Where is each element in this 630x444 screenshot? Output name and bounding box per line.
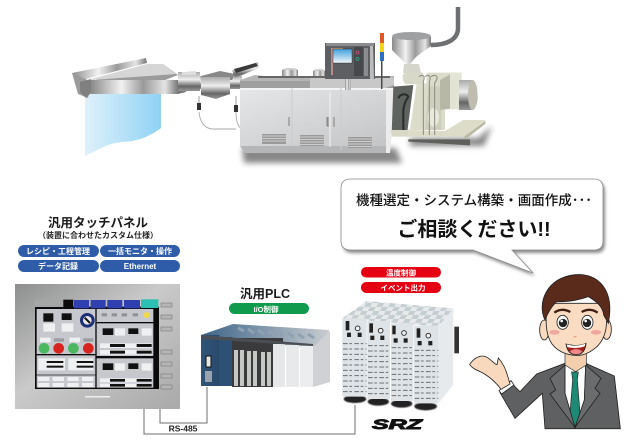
- tie: [570, 372, 580, 428]
- pill: recipe: レシピ・工程管理: [26, 246, 90, 256]
- PLC heading: 汎用PLC: [240, 286, 290, 301]
- extrusion machine illustration: [72, 7, 492, 163]
- pill: data logging: [18, 260, 99, 272]
- RS-485 wiring: [144, 387, 355, 434]
- SRZ logo: SRZ: [372, 416, 423, 432]
- film sheet: [85, 93, 161, 156]
- side keys: [161, 303, 172, 389]
- cabinet: [240, 88, 396, 153]
- pill: data logging: データ記録: [38, 261, 78, 271]
- SRZ controller modules: [342, 301, 459, 410]
- bubble shadow: [343, 182, 605, 276]
- barrel heaters: [240, 68, 394, 88]
- neck: [565, 350, 586, 372]
- material feed tube: [431, 7, 458, 45]
- eyes: [557, 315, 568, 329]
- SRZ terminal rows: [343, 344, 438, 398]
- PLC IO slots: [234, 350, 271, 386]
- connecting pipe and die: [178, 62, 259, 99]
- control box with screen: [325, 43, 375, 90]
- SRZ fronts: [342, 318, 438, 403]
- screen value bars: [47, 344, 152, 387]
- bezel: [15, 284, 180, 409]
- screen dial and buttons: [39, 312, 150, 354]
- RS-485 label: RS-485: [169, 424, 198, 434]
- PLC top: [201, 324, 329, 348]
- hand: [470, 356, 510, 389]
- mouth: [566, 343, 586, 355]
- face: [546, 303, 607, 356]
- screen gauges: [38, 323, 152, 387]
- lapels: [550, 365, 601, 427]
- SRZ shadow: [344, 395, 437, 410]
- touch panel feature pills: [18, 245, 180, 272]
- pill: recipe: [18, 245, 99, 257]
- brand label: [85, 396, 110, 398]
- pill: temperature control: 温度制御: [386, 268, 416, 278]
- SRZ front controls: [346, 321, 432, 345]
- SRZ dials: [355, 326, 431, 338]
- cooling roll table: [72, 58, 186, 98]
- screen tabs: [35, 299, 158, 308]
- screen panes: [37, 309, 153, 388]
- sensor probes: [197, 96, 242, 129]
- touch panel heading: [38, 215, 158, 240]
- touch panel device: [15, 284, 180, 409]
- eyebrows: [554, 310, 598, 313]
- bubble line 1: 機種選定・システム構築・画面作成･･･: [356, 192, 592, 208]
- cuff: [499, 381, 514, 394]
- speech bubble: [341, 179, 605, 276]
- nose: [573, 336, 577, 337]
- bubble line 2: ご相談ください!!: [397, 217, 551, 241]
- PLC connector: [206, 356, 211, 367]
- SRZ back connector: [454, 327, 459, 353]
- pill: ethernet: [100, 260, 180, 272]
- machine floor shadow: [242, 126, 492, 163]
- PLC front modules: [201, 335, 219, 386]
- hopper: [392, 32, 431, 73]
- jacket: [500, 363, 620, 429]
- businessman illustration: [470, 275, 620, 429]
- bubble body: [341, 179, 603, 273]
- PLC I/O pill: [229, 303, 309, 314]
- shirt: [565, 364, 586, 427]
- pill: ethernet: Ethernet: [124, 262, 157, 271]
- SRZ pills: [361, 267, 441, 293]
- SRZ side: [438, 308, 453, 403]
- touch panel subheading: （装置に合わせたカスタム仕様）: [38, 230, 158, 240]
- PLC I/O pill: I/O制御: [253, 304, 279, 314]
- extruder drive body: [392, 73, 485, 145]
- touch panel heading: 汎用タッチパネル: [48, 215, 148, 230]
- cheeks: [549, 330, 559, 335]
- top plate: [310, 78, 394, 88]
- pill: event output: イベント出力: [380, 282, 426, 292]
- PLC device: [201, 324, 330, 387]
- motor cylinder: [459, 80, 478, 110]
- pill: monitor: [100, 245, 180, 257]
- SRZ tops: [342, 301, 453, 327]
- screen: [35, 299, 159, 389]
- ears: [540, 320, 549, 340]
- hair: [542, 275, 610, 323]
- signal tower: [380, 33, 384, 89]
- pill: monitor: 一括モニタ・操作: [108, 246, 172, 256]
- screen readouts: [43, 313, 138, 370]
